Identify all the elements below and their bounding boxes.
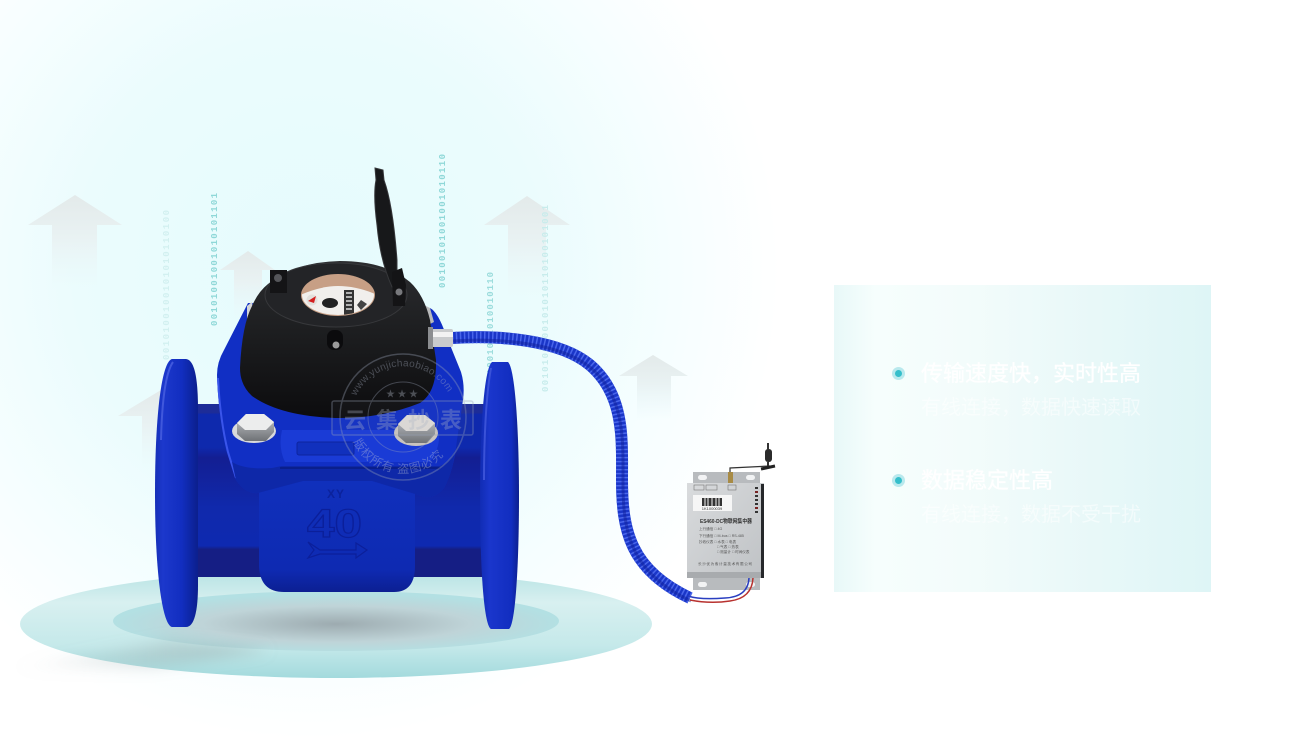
device title: ES460-DC物联网集中器 xyxy=(700,517,752,525)
bullet dot xyxy=(892,474,905,487)
device mounting plate xyxy=(693,472,760,590)
illustration: water meter with data collector xyxy=(0,0,776,678)
feature heading: 数据稳定性高 xyxy=(921,468,1053,493)
hex bolt right xyxy=(394,415,438,446)
register dial xyxy=(301,274,375,316)
device mounting holes xyxy=(698,475,707,480)
cap mounting ear left xyxy=(270,270,287,293)
feature description: 有线连接，数据不受干扰 xyxy=(921,504,1141,526)
binary data columns: 0010100100101010110100101001 xyxy=(541,204,551,392)
meter right flange xyxy=(480,362,519,629)
hex bolt left xyxy=(232,414,276,443)
cap front screw xyxy=(327,330,343,350)
feature heading: 传输速度快，实时性高 xyxy=(921,361,1141,386)
binary data columns: 00100101001001010110 xyxy=(438,154,448,288)
small rear bolts xyxy=(247,302,254,320)
barcode label xyxy=(693,495,732,511)
device specs: 长沙优为索计量技术有限公司 xyxy=(698,561,752,566)
embossed XY 40 marking xyxy=(307,487,367,558)
panel: features xyxy=(834,285,1211,592)
top port labels xyxy=(694,485,736,490)
watermark seal: ★ ★ ★ xyxy=(386,389,418,399)
background glow xyxy=(0,0,800,750)
device front panel xyxy=(687,483,764,578)
cable connector xyxy=(428,327,453,349)
feature description: 有线连接，数据快速读取 xyxy=(921,397,1141,419)
meter lower body xyxy=(259,480,415,592)
binary data columns xyxy=(162,154,551,400)
lid hinge xyxy=(392,268,406,306)
meter black cap xyxy=(240,168,436,418)
device specs: □ 测量计 □ 时间仪表 xyxy=(717,549,750,554)
barcode label: 1K1000039 xyxy=(702,506,723,511)
binary data columns: 00101001001010101101 xyxy=(210,192,220,326)
feature: transfer speed xyxy=(892,361,1141,419)
terminal block xyxy=(687,572,761,578)
binary data columns: 0010100100101010110100 xyxy=(162,210,172,360)
red and blue wires xyxy=(688,578,753,602)
feature: data stability xyxy=(892,468,1141,526)
embossed XY 40 marking: XY xyxy=(327,487,345,501)
watermark seal: www.yunjichaobiao.com xyxy=(351,359,452,395)
hinged lid xyxy=(375,168,397,287)
binary data columns: 00101001001010010110 xyxy=(486,272,496,400)
status LEDs xyxy=(755,487,758,513)
device specs: □ 气表 □ 热表 xyxy=(717,544,739,549)
floor rings xyxy=(8,570,652,678)
bullet dot xyxy=(892,367,905,380)
device specs: 上行通信 □ 4G xyxy=(699,526,723,531)
watermark seal xyxy=(331,353,474,481)
water meter xyxy=(155,168,519,629)
device antenna xyxy=(728,443,775,484)
watermark seal: 云集抄表 xyxy=(344,408,472,433)
meter pipe xyxy=(190,404,490,577)
blue corrugated cable xyxy=(452,337,691,601)
device specs: 抄收仪表 □ 水表 □ 电表 xyxy=(699,539,736,544)
watermark seal: 版权所有 盗图必究 xyxy=(352,438,444,474)
meter left flange xyxy=(155,359,198,627)
device specs xyxy=(698,526,752,566)
device specs: 下行通信 □ M-bus □ RS-485 xyxy=(699,533,744,538)
meter upper casing xyxy=(217,302,464,497)
data collector device xyxy=(687,443,775,602)
background upload arrows xyxy=(28,195,688,470)
embossed XY 40 marking: 40 xyxy=(307,502,362,546)
